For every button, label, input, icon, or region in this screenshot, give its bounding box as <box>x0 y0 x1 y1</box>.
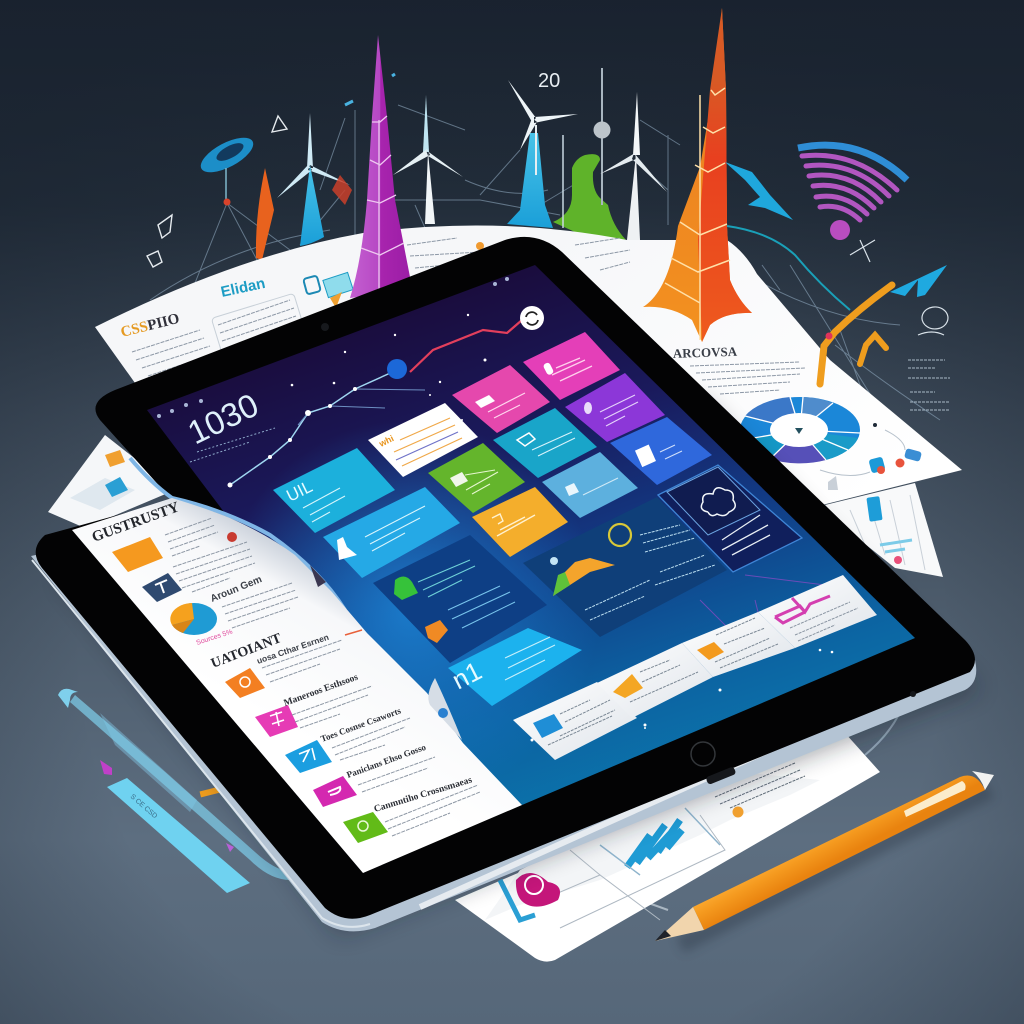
row titles: uosa Cthar Esrnen <box>255 632 330 666</box>
small sketch icons on the left <box>147 74 395 267</box>
network of thin lines behind the scene <box>150 105 940 910</box>
under sheet right <box>825 483 943 577</box>
tile: cyan with chart label <box>273 448 395 533</box>
card 4 <box>758 575 877 648</box>
orange brackets <box>820 285 892 384</box>
green icon <box>343 812 388 843</box>
line chart <box>228 320 522 488</box>
navigation icons <box>157 277 509 418</box>
tablet silver rim <box>31 500 976 931</box>
purple spire <box>350 35 412 298</box>
title number: 20: 20 <box>538 70 560 92</box>
mini area chart <box>550 557 615 596</box>
tile: green <box>428 443 525 513</box>
pink caption: Sources 5% <box>195 629 234 647</box>
magenta icon <box>313 776 357 807</box>
large back sheet <box>95 225 962 505</box>
wind turbine 1 <box>277 113 352 246</box>
tile: light blue <box>542 452 638 518</box>
stars <box>291 314 833 742</box>
small red marker and pointer <box>227 532 362 635</box>
orange spire <box>643 8 752 342</box>
chart frames <box>530 815 725 928</box>
sheet body copy <box>132 238 805 394</box>
sheet small icons <box>211 242 484 355</box>
cyan label strip: S CE CSD <box>129 793 158 820</box>
row titles: Paniclans Ehso Gosso <box>345 742 428 780</box>
small left sheet <box>48 435 175 528</box>
blue icon <box>285 740 332 773</box>
navy icon <box>142 573 182 602</box>
blue globe marker <box>387 359 407 379</box>
card 1 <box>513 682 637 760</box>
curl fold <box>428 678 462 740</box>
screen <box>147 265 915 805</box>
tile: cyan bottom <box>447 628 582 706</box>
card 3 <box>682 612 795 677</box>
sub-caption under figure <box>190 428 275 462</box>
sheet heading: teal: Elidan <box>219 275 267 301</box>
row titles <box>255 632 474 815</box>
tile heading: UIL <box>283 477 316 506</box>
wind turbine 3 with cyan cone <box>507 80 578 228</box>
row titles: Toes Cosnse Csaworts <box>319 705 403 744</box>
pink badge <box>500 873 560 920</box>
subheading: Aroun Gem <box>209 574 264 605</box>
wind turbine 2 <box>393 95 463 224</box>
tablet shadow <box>60 400 980 935</box>
stylus and note at lower left <box>58 689 295 893</box>
green tower <box>553 68 626 240</box>
wind turbine 4 <box>600 92 667 240</box>
orange icon 2 <box>225 668 265 698</box>
lower sheet <box>455 733 880 962</box>
tile: pink top <box>523 332 620 400</box>
panel: dark blue right <box>523 497 727 637</box>
tile: white <box>368 403 478 477</box>
tile: teal <box>493 408 597 478</box>
paper plane <box>890 265 947 297</box>
home button <box>691 742 715 766</box>
row titles: Canmntiho Crosnsmaeas <box>373 775 474 815</box>
teal curve <box>727 226 850 310</box>
donut chart <box>740 397 860 463</box>
purple connector lines <box>700 575 825 635</box>
tile: blue <box>610 417 712 485</box>
white document page <box>72 498 522 873</box>
tile: cyan bottom: n1 <box>447 655 486 695</box>
charging port <box>706 766 736 785</box>
sheet heading: left: CSSPIIO <box>119 311 181 341</box>
wifi symbol <box>798 145 907 240</box>
sheet heading: right: ARCOVSA <box>673 344 738 361</box>
body copy lines <box>165 518 480 836</box>
panel: dark blue left <box>373 535 547 663</box>
orange spike <box>256 168 274 260</box>
small coloured chart marks <box>820 423 922 490</box>
tile: purple <box>565 373 665 442</box>
card 2 <box>597 643 713 718</box>
panel: outlined navy card <box>658 465 802 572</box>
headphone jack <box>910 691 916 697</box>
page curl edge <box>130 458 345 610</box>
headline figure: 1030 <box>182 386 264 451</box>
row titles: Maneroos Esthsoos <box>283 673 360 709</box>
camera <box>321 323 329 331</box>
blue arrow <box>725 162 793 220</box>
fold dot <box>438 708 448 718</box>
tile: pink <box>452 365 550 433</box>
pie chart <box>170 603 217 635</box>
pink icon <box>255 705 298 737</box>
tablet black bezel <box>36 237 975 919</box>
section heading: UATOIANT <box>209 631 284 672</box>
tile: cyan wide <box>323 487 460 578</box>
bar chart <box>600 808 720 875</box>
cyan label strip <box>107 778 250 893</box>
refresh badge <box>520 306 544 330</box>
page heading: GUSTRUSTY <box>90 499 182 546</box>
side sketch and note <box>850 240 950 410</box>
orange icon <box>112 537 163 572</box>
pencil <box>655 771 994 945</box>
icon: satellite dish <box>196 131 258 206</box>
tile: yellow <box>472 487 568 557</box>
tablet <box>31 237 980 935</box>
tile heading: whi <box>377 433 395 449</box>
